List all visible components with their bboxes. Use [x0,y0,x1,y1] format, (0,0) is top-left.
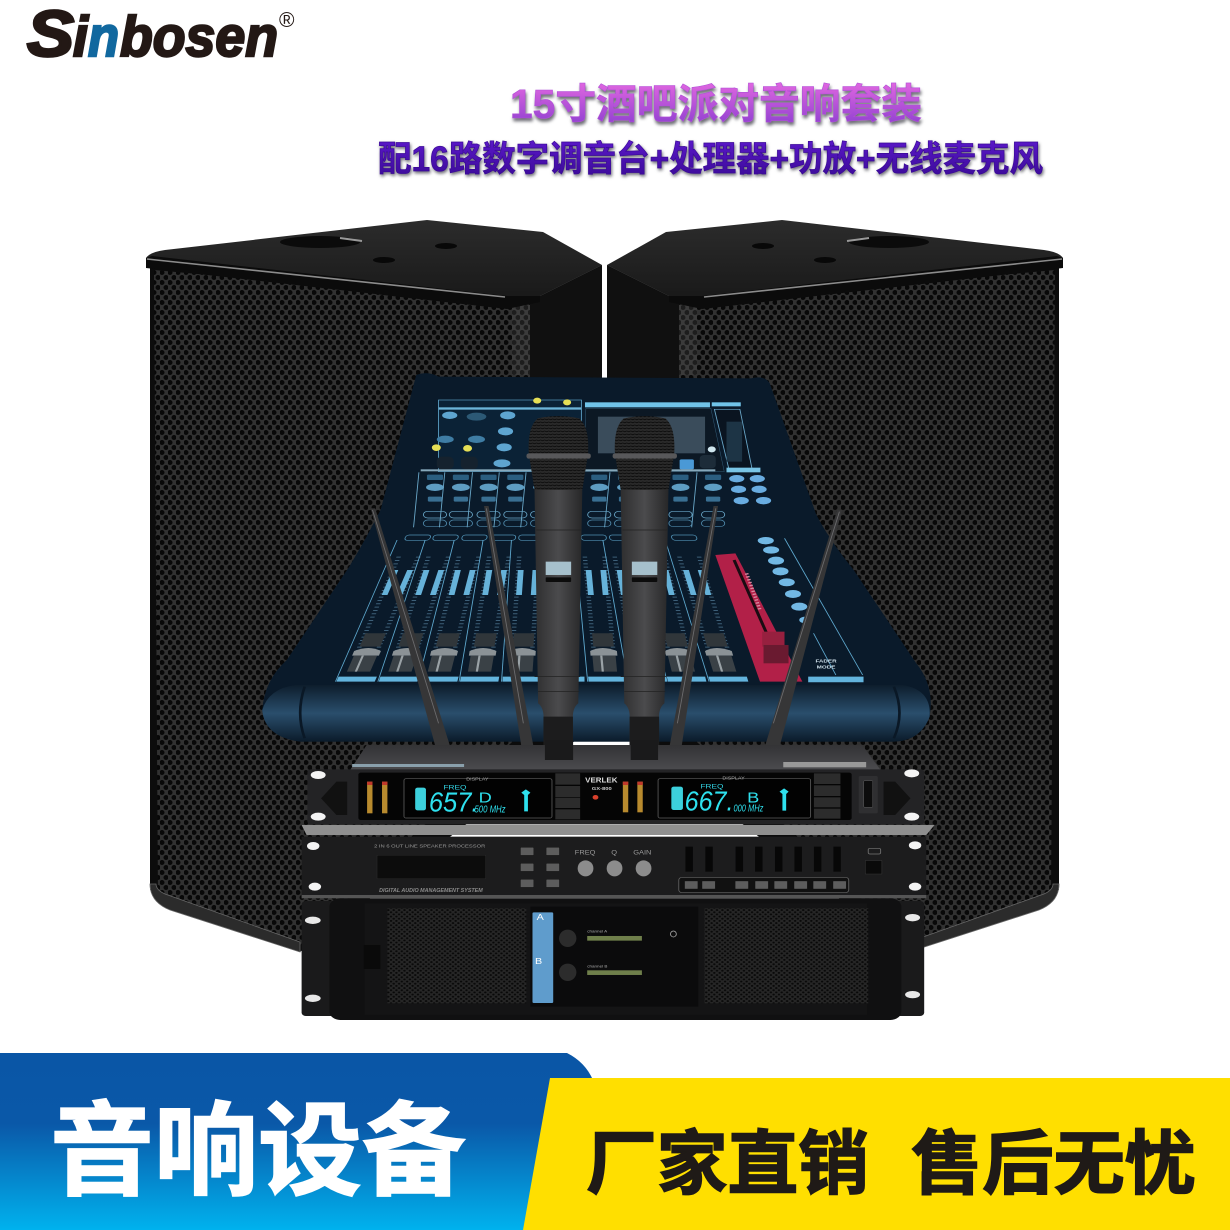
slogan: after-sales: 售后无忧 [911,1125,1196,1203]
brand logo: Sinbosen: i [73,5,89,69]
amplifier grilles [387,908,868,1003]
power amplifier rack unit [302,898,924,1020]
level meters [367,782,643,813]
right display: 667. [685,786,734,817]
left display: 500 MHz [474,804,506,815]
right display: DISPLAY [722,776,745,781]
processor channel strips [679,847,882,893]
wireless microphones [527,416,677,750]
processor knobs: GAIN [633,850,652,856]
title: 15寸酒吧派对音响套装 [510,81,922,127]
mixer channel buttons [414,472,771,527]
left display: D [479,789,492,806]
amplifier control panel: A [537,913,544,923]
processor knobs: Q [611,850,617,856]
left display: FREQ [443,783,467,791]
digital mixing console [262,373,931,750]
mixer side buttons [758,537,812,623]
brand logo: Sinbosen: ® [279,9,295,32]
red master fader: FADER [815,659,837,664]
left speaker [146,220,602,952]
red master fader [715,538,864,682]
red master fader: MODE [817,665,836,670]
wireless receiver rack unit [302,740,935,835]
right speaker [607,220,1063,952]
right display: B [747,789,759,806]
antennas [371,506,842,745]
speaker processor rack unit: DIGITAL AUDIO MANAGEMENT SYSTEM [379,888,483,894]
amplifier control panel: channel A [587,929,607,934]
banner heading: 音响设备 [50,1095,466,1209]
amplifier control panel: B [535,957,542,967]
amplifier control panel [364,907,698,1007]
left display: DISPLAY [466,777,489,782]
processor buttons [520,847,559,887]
left display: 657. [429,787,479,818]
mixer top controls [421,398,760,472]
amplifier control panel: channel B [587,964,608,968]
blue banner [0,1053,593,1230]
speaker processor rack unit [302,837,926,898]
brand logo: Sinbosen: n [88,5,119,69]
left display [404,777,552,818]
processor knobs [575,850,652,876]
right display: FREQ [700,782,724,790]
speaker processor rack unit: 2 IN 6 OUT LINE SPEAKER PROCESSOR [374,844,485,849]
mixer fader channels [335,535,748,682]
brand logo: Sinbosen: bosen [120,5,278,69]
yellow banner [523,1078,1230,1230]
receiver buttons and brand: VERLEK [585,776,617,784]
subtitle: 配16路数字调音台+处理器+功放+无线麦克风 [378,140,1043,179]
right display [658,776,811,818]
brand logo: Sinbosen [27,0,295,70]
receiver buttons and brand [555,773,878,819]
processor knobs: FREQ [575,850,595,856]
slogan: factory direct: 厂家直销 [586,1125,869,1203]
receiver buttons and brand: GX-800 [592,786,612,792]
right display: 000 MHz [734,804,764,814]
